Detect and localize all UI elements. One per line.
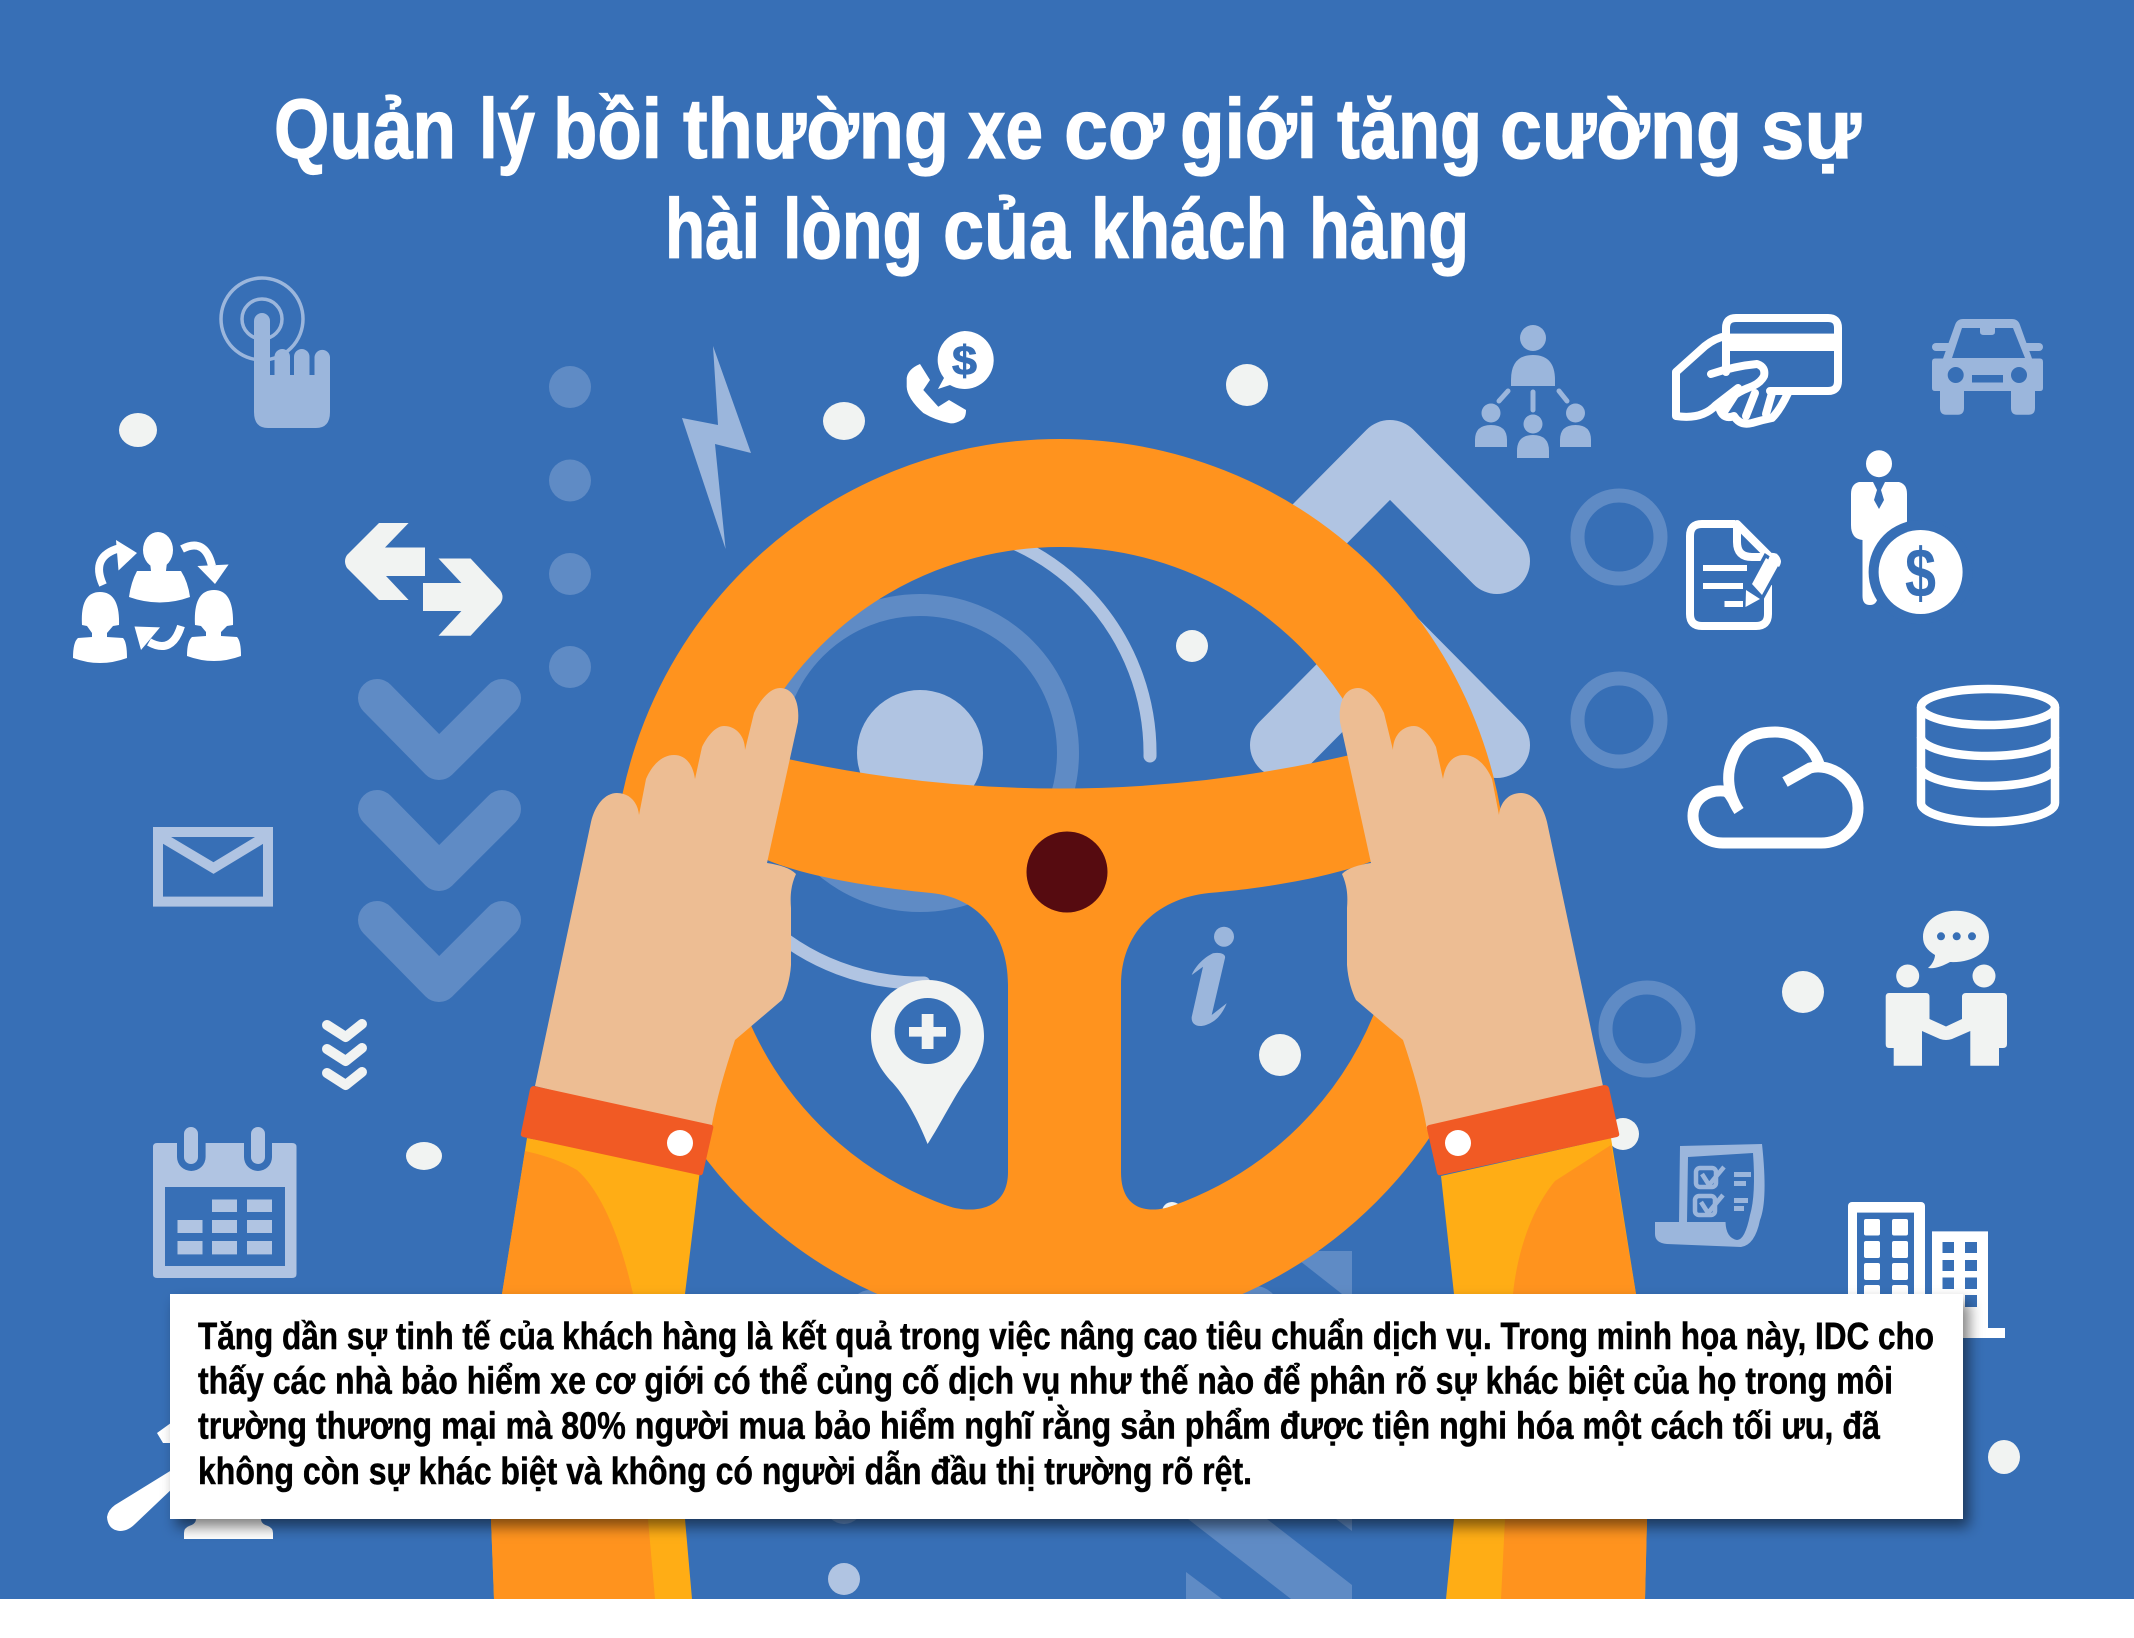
large chevrons pointing up (1283, 453, 1497, 745)
title: tăng (1337, 82, 1482, 176)
icon: car (1932, 319, 2043, 415)
left hand (535, 688, 798, 1130)
panel body text: trường thương mại mà 80% người mua bảo hiểm nghĩ rằng sản phẩm được tiện nghi hóa một cách tối ưu, đã (198, 1404, 1881, 1448)
title: xe (968, 82, 1043, 176)
right hand (1340, 688, 1603, 1130)
light dot bottom (828, 1563, 860, 1595)
wheel spokes (767, 755, 1400, 1270)
title: khách (1091, 182, 1287, 276)
title: lòng (783, 182, 923, 276)
left cuff (521, 1086, 713, 1175)
icon: left and right arrows (345, 523, 502, 636)
title: hài (665, 182, 760, 276)
icon: database (1921, 689, 2055, 822)
decorative rings (1578, 496, 1688, 1070)
icon: location pin plus (871, 980, 984, 1144)
icon: lightning bolt (682, 346, 751, 549)
title: cơ (1064, 82, 1164, 176)
icon: three people cycle (73, 532, 241, 663)
icon: gavel partly hidden (107, 1420, 273, 1539)
title (274, 82, 1861, 276)
icon: hand with credit card (1676, 318, 1838, 424)
title: thường (683, 82, 949, 176)
icon: businessman with dollar coin: $ (1905, 534, 1936, 612)
diagonal bands behind panel (825, 1251, 1352, 1599)
text panel (170, 1294, 1963, 1519)
title: bồi (553, 82, 662, 176)
icon: small double chevrons (327, 1024, 362, 1085)
dial rings behind wheel (690, 523, 1150, 983)
icon: cloud (1693, 732, 1858, 843)
title: hàng (1309, 182, 1469, 276)
icon: people network (1475, 325, 1591, 458)
decorative dots column (549, 366, 591, 688)
icon: handshake with speech bubble (1886, 911, 2007, 1066)
title: Quản (274, 82, 456, 176)
icon: office buildings (1848, 1202, 2005, 1338)
icon: touch hand (221, 278, 330, 428)
icon: phone with dollar bubble: $ (952, 337, 977, 384)
icon: businessman with dollar coin (1851, 450, 1973, 624)
bottom white strip (0, 1599, 2134, 1638)
title: giới (1180, 82, 1317, 176)
small white dots (119, 364, 2020, 1474)
icon: document with pen (1690, 524, 1781, 626)
title: của (943, 182, 1071, 276)
wheel hub (1026, 832, 1108, 912)
icon: envelope (158, 832, 268, 902)
large chevrons pointing down (377, 698, 502, 983)
left sleeve (491, 1138, 700, 1599)
icon: calendar (153, 1127, 296, 1278)
steering wheel (667, 493, 1453, 1279)
title: sự (1761, 82, 1861, 176)
title: lý (479, 82, 535, 176)
icon: info symbol (1192, 927, 1234, 1026)
title: cường (1500, 82, 1742, 176)
panel body text: không còn sự khác biệt và không có người dẫn đầu thị trường rõ rệt. (198, 1449, 1252, 1493)
right sleeve (1441, 1138, 1647, 1599)
panel body text (198, 1316, 1934, 1493)
icon: phone with dollar bubble (907, 331, 994, 423)
right cuff (1427, 1085, 1619, 1175)
icon: checklist scroll (1655, 1144, 1765, 1247)
